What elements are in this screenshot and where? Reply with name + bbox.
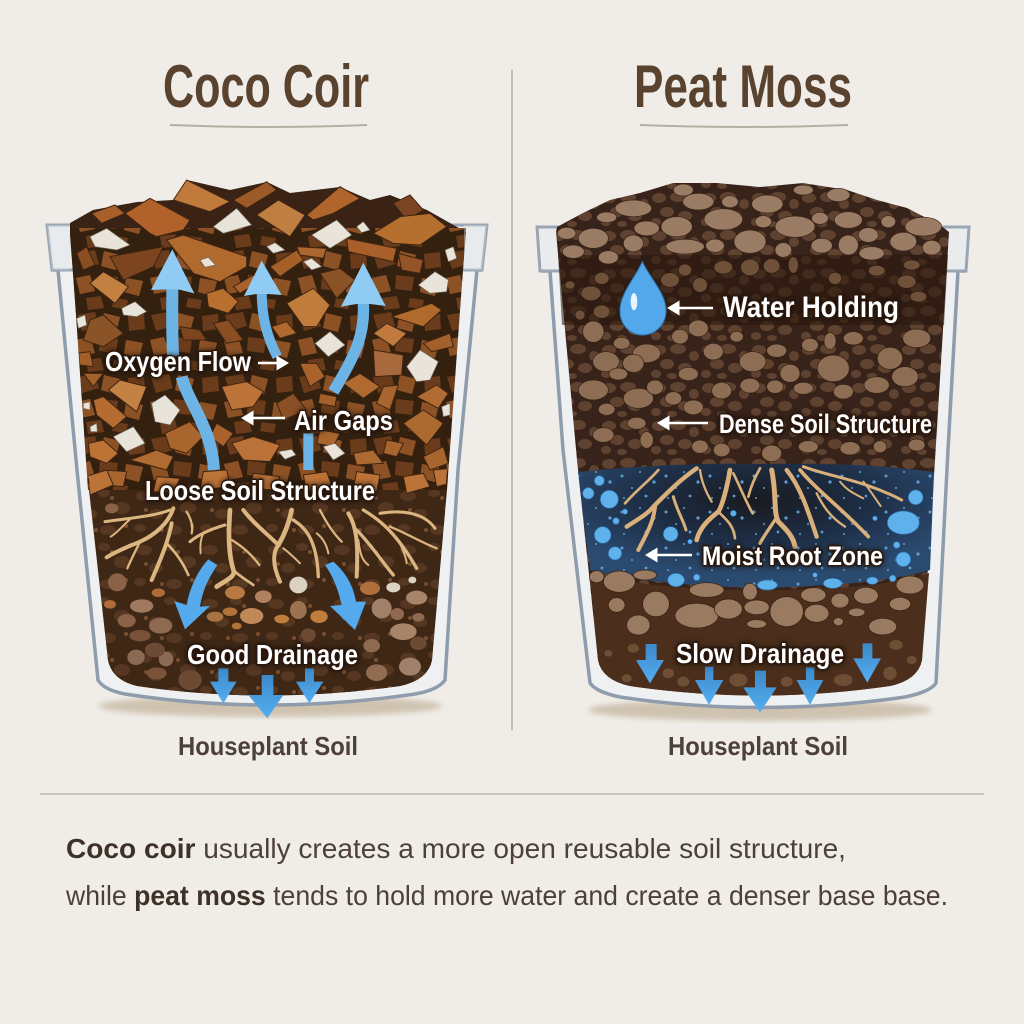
pot [47, 225, 487, 705]
panel: coco coir pot: Good Drainage [187, 639, 358, 670]
label: houseplant soil left: Houseplant Soil [178, 731, 358, 761]
icon: oxygen flow arrows [151, 249, 386, 470]
soil: coir layer filler [70, 228, 466, 490]
lower pebbles and beads [583, 476, 924, 687]
ground shadow [588, 699, 932, 721]
moist root zone [578, 464, 934, 588]
soil: lower layer filler [89, 490, 447, 696]
lower soil [590, 573, 929, 696]
panel: coco coir pot: Air Gaps [294, 405, 393, 436]
dark holding band [558, 255, 948, 325]
title: Coco Coir: Coco Coir [163, 53, 369, 120]
pot rim edges [47, 225, 487, 270]
coir chunks [77, 180, 453, 495]
horizontal divider [40, 793, 984, 795]
tiny water specks [578, 464, 934, 588]
panel: peat moss pot: Dense Soil Structure [719, 409, 932, 439]
caption: Coco coir usually creates a more open reusable soil structure, [66, 833, 846, 864]
panel: peat moss pot: Slow Drainage [676, 638, 844, 669]
center divider [511, 70, 513, 730]
roots [625, 467, 902, 550]
label: houseplant soil right: Houseplant Soil [668, 731, 848, 761]
panel: peat moss pot [537, 183, 969, 721]
ground shadow [98, 695, 442, 717]
white perlite stones [77, 208, 457, 460]
roots [105, 508, 437, 587]
upper pebbles [557, 184, 942, 462]
pot [537, 227, 969, 708]
labels: Oxygen Flow [105, 346, 251, 377]
soil base [556, 183, 949, 696]
panel: coco coir pot: Loose Soil Structure [145, 475, 375, 506]
labels: Water Holding [723, 291, 899, 324]
caption: while peat moss tends to hold more water and create a denser base base. [65, 880, 948, 911]
caption [65, 833, 948, 911]
panel: peat moss pot: Moist Root Zone [702, 541, 883, 571]
panel: coco coir pot [47, 180, 487, 718]
icon: water drop [620, 262, 666, 335]
drain arrows [636, 643, 881, 713]
title: Peat Moss: Peat Moss [634, 53, 852, 120]
lower pebbles [104, 503, 427, 690]
drainage arrows [174, 559, 366, 718]
soil base [70, 180, 466, 696]
